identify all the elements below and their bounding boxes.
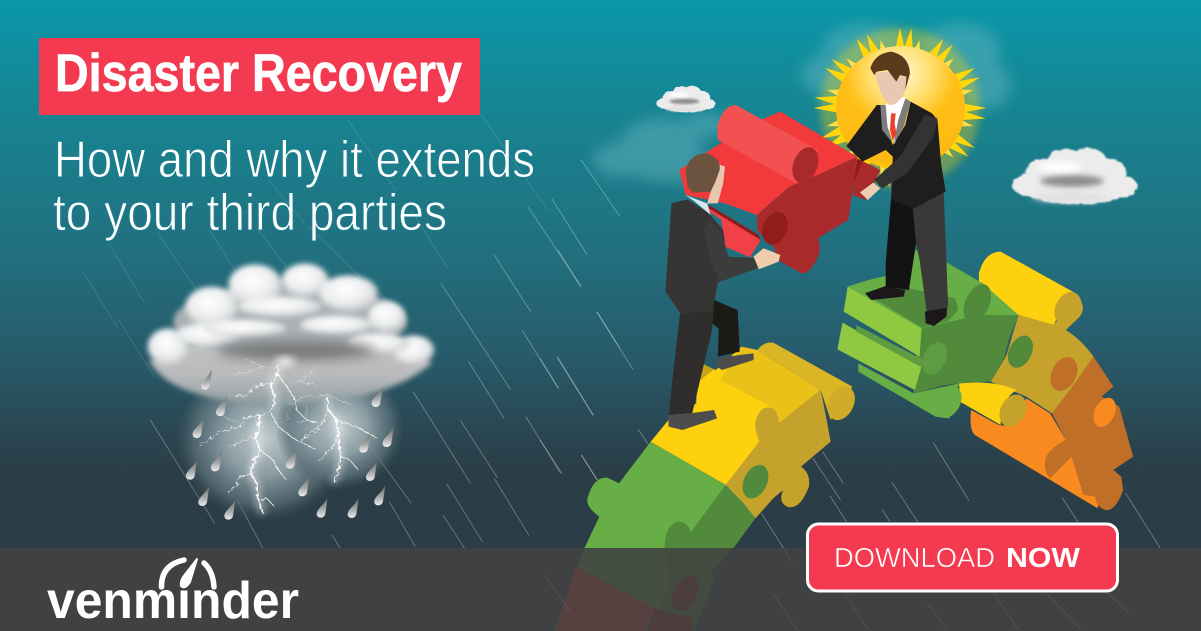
tie: [890, 113, 896, 141]
red piece under footer: [556, 567, 704, 631]
raindrops: [186, 369, 393, 520]
businessman left: [665, 153, 780, 430]
lapels: [880, 98, 911, 144]
download button: [808, 524, 1118, 591]
icon: small white cloud: [656, 86, 715, 112]
lightning bolts: [199, 359, 377, 513]
storm glow: [175, 363, 405, 530]
title banner: [39, 38, 480, 115]
subtitle: to your third parties: [53, 184, 447, 242]
download button: DOWNLOAD: [834, 542, 995, 573]
legs and shoes: [669, 300, 754, 430]
title banner: Disaster Recovery: [55, 44, 462, 103]
logo gauge: [161, 559, 214, 587]
logo wordmark: venminder: [47, 572, 299, 630]
rain streaks over footer: [544, 548, 1129, 630]
footer bar: [0, 548, 1201, 631]
icon: large white cloud: [1012, 148, 1137, 204]
faint background clouds: [592, 24, 1011, 184]
icon: storm cloud with lightning and raindrops: [148, 263, 434, 530]
subtitle: How and why it extends: [54, 131, 535, 189]
upper body: [665, 153, 780, 313]
left leg: [886, 198, 916, 290]
yellow piece: [959, 252, 1094, 430]
puzzle bridge: lower left green and yellow pieces: [554, 343, 860, 631]
subtitle: [53, 131, 535, 242]
logo: venminder: [47, 559, 299, 630]
shirt: [884, 97, 908, 144]
yellow piece: [651, 343, 860, 518]
red puzzle piece: [679, 105, 880, 273]
hair: [870, 52, 910, 90]
cloud body: [148, 263, 434, 406]
puzzle bridge: upper right green, yellow and orange pieces: [837, 250, 1133, 510]
businessman right: body and legs: [846, 52, 948, 326]
jacket: [846, 102, 946, 208]
download button: NOW: [1006, 542, 1081, 573]
green piece: [554, 442, 755, 631]
shoes: [865, 286, 947, 326]
businessman right: arm and hand: [860, 115, 937, 200]
face: [875, 72, 906, 105]
rain streaks: [83, 113, 620, 548]
lightning glow: [251, 365, 341, 513]
green piece: [837, 250, 1037, 421]
icon: sun: [814, 28, 986, 188]
right leg: [912, 188, 948, 312]
orange piece: [970, 357, 1133, 510]
